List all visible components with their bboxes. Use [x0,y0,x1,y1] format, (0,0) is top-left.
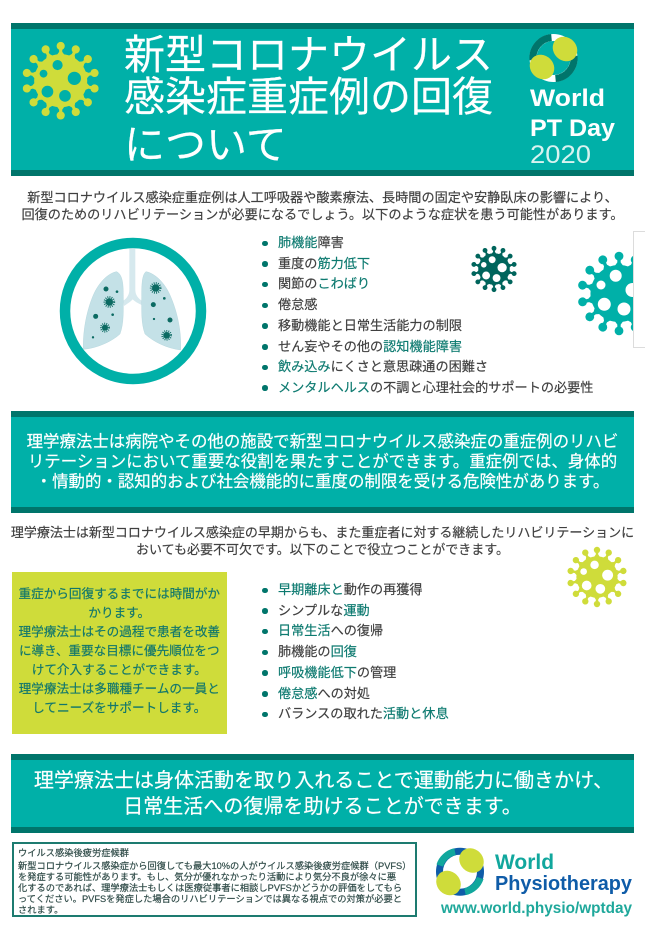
icon: lungs in a ring [60,238,206,384]
website url: www.world.physio/wptday [440,900,632,917]
list item: 倦怠感 [278,297,317,312]
list item: せん妄やその他の認知機能障害 [278,338,462,354]
title: 新型コロナウイルス [124,32,493,78]
intro text: 回復のためのリハビリテーションが必要になるでしょう。以下のような症状を患う可能性があります。 [21,207,624,222]
note body: 新型コロナウイルス感染症から回復しても最大10%の人がウイルス感染後疲労症候群（PVFS） [18,861,411,871]
thin frame at right edge [633,231,645,348]
title: 感染症重症例の回復 [124,74,493,120]
icon: dark virus [471,246,517,292]
title: について [124,122,287,168]
list item: 呼吸機能低下の管理 [278,665,396,680]
panel: yellow recovery note: かります。 [88,606,150,620]
intro text [21,190,624,222]
logo: World PT Day 2020 [529,34,616,169]
callout band: role of physical therapists: 理学療法士は病院やその他の施設で新型コロナウイルス感染症の重症例のリハビ [27,432,618,450]
callout band: physical activity: 日常生活への復帰を助けることができます。 [123,796,522,818]
panel: yellow recovery note [12,572,227,734]
panel: yellow recovery note: 理学療法士は多職種チームの一員と [19,682,220,696]
logo: World Physiotherapy [436,848,633,917]
list item: バランスの取れた活動と休息 [278,706,449,721]
logo: World Physiotherapy: Physiotherapy [495,872,633,895]
list item: 肺機能の回復 [278,644,357,659]
callout band: role of physical therapists [11,411,634,513]
logo: World PT Day 2020: PT Day [530,115,616,142]
logo: World PT Day 2020: 2020 [530,141,591,169]
list item: 早期離床と動作の再獲得 [278,582,423,597]
symptom list [262,235,593,395]
panel: yellow recovery note: 理学療法士はその過程で患者を改善 [18,625,220,639]
wordmark: World [495,850,554,874]
panel: yellow recovery note: けて介入することができます。 [32,663,207,677]
header banner [11,23,634,176]
note body: されます。 [18,905,63,915]
icon: yellow-green virus [568,546,626,608]
callout band: role of physical therapists: ・情動的・認知的および社会機能的に重度の制限を受ける危険性があります。 [36,473,609,491]
paragraph: 理学療法士は新型コロナウイルス感染症の早期からも、また重症者に対する継続したリハビリテーションに [11,525,634,540]
intro text: 新型コロナウイルス感染症重症例は人工呼吸器や酸素療法、長時間の固定や安静臥床の影響により、 [27,190,618,205]
callout band: role of physical therapists: リテーションにおいて重要な役割を果たすことができます。重症例では、身体的 [28,452,617,470]
paragraph [11,525,634,556]
note heading: ウイルス感染後疲労症候群 [18,848,129,858]
note body: を発症する可能性があります。もし、気分が優れなかったり活動により気分不良が徐々に悪 [18,872,396,882]
icon: teal virus [578,252,633,336]
list item: 飲み込みにくさと意思疎通の困難さ [278,359,488,374]
list item: シンプルな運動 [278,603,370,618]
list item: 重度の筋力低下 [278,256,370,271]
panel: yellow recovery note: に導き、重要な目標に優先順位をつ [19,644,220,658]
title [124,32,493,168]
panel: post-viral fatigue syndrome note [12,842,417,917]
list item: 肺機能障害 [278,235,344,250]
note body: ってください。PVFSを発症した場合のリハビリテーションでは異なる視点での対策が必要と [18,894,402,904]
list item: メンタルヘルスの不調と心理社会的サポートの必要性 [278,380,593,395]
icon: yellow virus [22,42,99,120]
logo: World PT Day 2020: World [530,85,605,112]
panel: yellow recovery note: してニーズをサポートします。 [32,701,206,715]
callout band: physical activity [11,754,634,833]
note body [18,860,411,915]
list item: 日常生活への復帰 [278,623,383,638]
list item: 倦怠感への対処 [278,686,370,700]
panel: yellow recovery note: 重症から回復するまでには時間がか [18,587,220,601]
rehab list [262,582,449,721]
logo mark [431,843,489,900]
paragraph: おいても必要不可欠です。以下のことで役立つことができます。 [136,542,509,556]
callout band: physical activity: 理学療法士は身体活動を取り入れることで運動能力に働きかけ、 [34,770,613,792]
note body: 化するのであれば、理学療法士もしくは医療従事者に相談しPVFSかどうかの評価をしてもら [18,883,402,893]
list item: 関節のこわばり [278,276,370,291]
list item: 移動機能と日常生活能力の制限 [278,318,462,333]
